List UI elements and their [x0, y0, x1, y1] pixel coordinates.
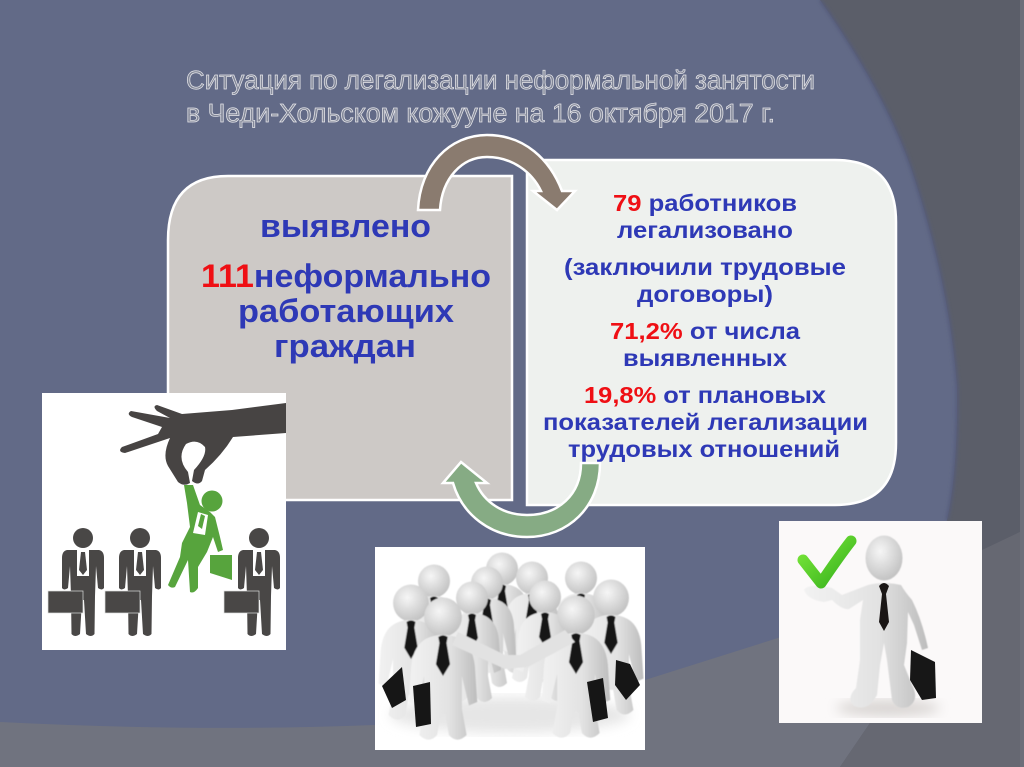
icon: green check	[803, 541, 851, 583]
panel text: identified	[201, 208, 491, 364]
panel text: legalized: легализовано	[617, 217, 793, 243]
panel text: identified: 111неформально	[201, 258, 491, 294]
picture: man with check mark	[779, 521, 982, 723]
panel text: legalized	[543, 190, 868, 462]
picture: hand picking a worker	[42, 393, 286, 650]
panel text: legalized: 79 работников	[613, 190, 797, 216]
panel text: legalized: выявленных	[623, 345, 787, 371]
panel text: legalized: договоры)	[637, 281, 773, 307]
icon: dark workers	[48, 528, 280, 636]
icon: green worker	[168, 485, 232, 592]
panel: identified	[168, 176, 512, 500]
tie	[879, 583, 889, 631]
title: Ситуация по легализации неформальной занятости	[186, 67, 815, 95]
briefcase	[910, 650, 936, 700]
panel text: identified: выявлено	[260, 208, 431, 244]
panel text: legalized: 71,2% от числа	[610, 318, 801, 344]
title: в Чеди-Хольском кожууне на 16 октября 2017 г.	[186, 100, 775, 128]
panel text: legalized: 19,8% от плановых	[584, 382, 826, 408]
panel text: legalized: показателей легализации	[543, 409, 868, 435]
panel text: legalized: (заключили трудовые	[564, 254, 846, 280]
picture: team	[375, 547, 645, 750]
title	[186, 67, 815, 128]
panel text: legalized: трудовых отношений	[568, 436, 840, 462]
icon: hand	[120, 403, 286, 485]
white figure	[804, 536, 928, 708]
briefcases	[382, 660, 640, 727]
panel: legalized	[527, 160, 896, 505]
arrow: brown to right panel	[418, 135, 575, 210]
panel text: identified: граждан	[274, 328, 416, 364]
team figures	[379, 552, 643, 740]
panel text: identified: работающих	[238, 293, 454, 329]
arrow: green to left panel	[443, 462, 600, 537]
